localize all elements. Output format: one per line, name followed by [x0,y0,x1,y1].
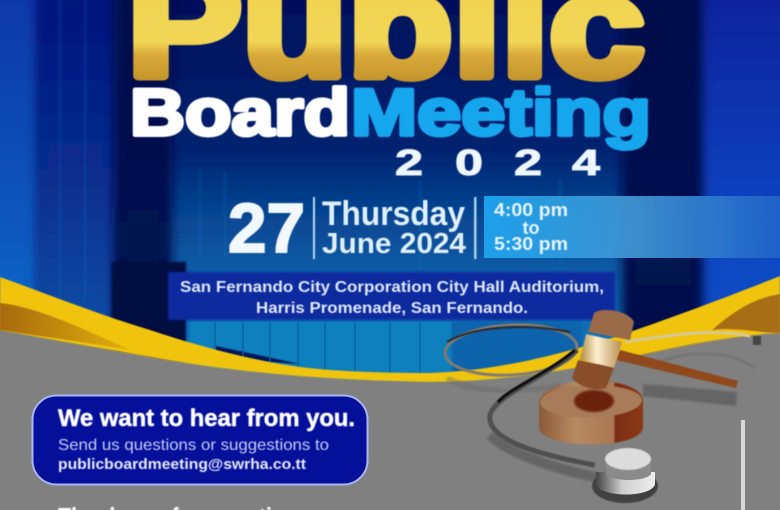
title: Board Meeting [130,75,651,149]
venue box [168,272,615,320]
contact callout: We want to hear from you. [58,405,355,432]
title: Board Meeting: Board [130,75,350,149]
date block: Thursday [322,195,465,233]
vertical divider [741,420,745,510]
icon: stethoscope chest piece [592,448,658,503]
year 2024: 2 [395,142,423,183]
time box: 5:30 pm [494,234,568,254]
venue box: Harris Promenade, San Fernando. [256,300,528,317]
venue box: San Fernando City Corporation City Hall Auditorium, [180,279,604,296]
year 2024 [395,142,600,183]
year 2024: 0 [455,142,483,183]
date block: 27 [228,189,305,267]
time box: to [522,218,540,238]
icon: stethoscope [444,322,761,478]
date block [228,189,476,267]
contact callout [32,396,368,484]
year 2024: 4 [572,142,600,183]
building background [0,0,780,400]
date block: June 2024 [322,228,466,260]
icon: gavel [539,310,738,444]
year 2024: 2 [514,142,542,183]
title: Board Meeting: Meeting [351,75,651,149]
gold swoosh ribbon [0,276,780,420]
time box [484,196,780,258]
contact callout: publicboardmeeting@swrha.co.tt [58,456,306,473]
contact callout: Send us questions or suggestions to [58,437,329,454]
time box: 4:00 pm [494,200,568,220]
